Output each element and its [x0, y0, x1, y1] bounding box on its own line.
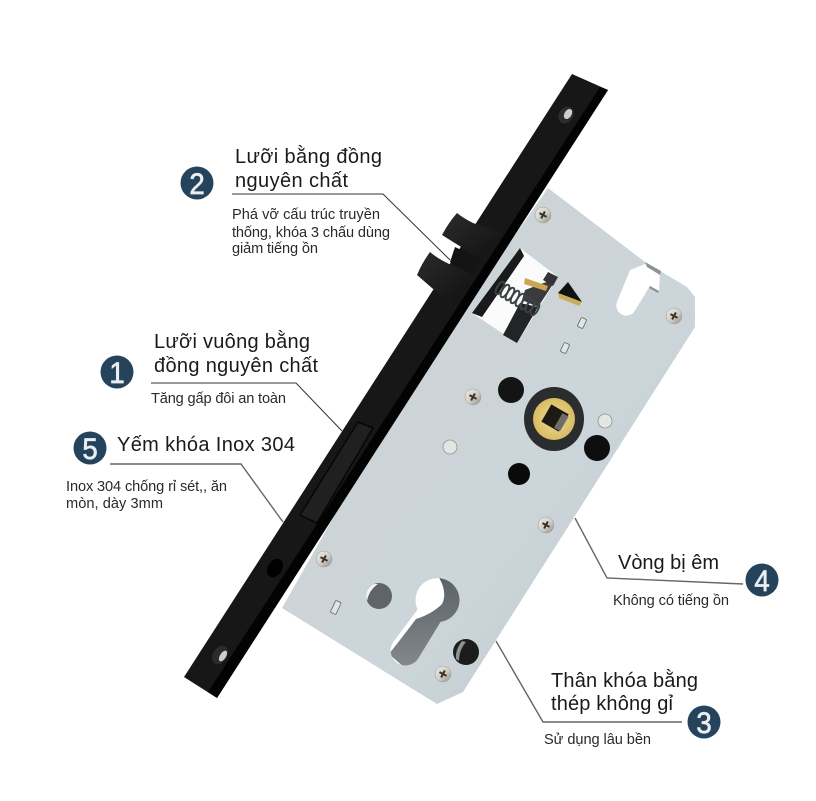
leader line 4 — [575, 518, 743, 584]
leader line 3 — [496, 641, 682, 722]
latch hooks — [417, 213, 502, 303]
badge 5: 5 — [82, 433, 98, 466]
badge 1: 1 — [109, 357, 125, 390]
heading 2: nguyên chất — [235, 170, 348, 192]
description 2: Phá vỡ cấu trúc truyền — [232, 207, 380, 223]
rivets — [443, 414, 612, 454]
heading 2 — [235, 145, 382, 192]
holes — [366, 377, 610, 665]
callout 4 — [575, 518, 778, 609]
description 2: thống, khóa 3 chấu dùng — [232, 225, 390, 241]
lock diagram — [184, 74, 695, 736]
badge 4: 4 — [754, 565, 770, 598]
description 2 — [232, 207, 390, 257]
bolt window — [472, 248, 558, 343]
description 1: Tăng gấp đôi an toàn — [151, 391, 286, 407]
callout 2 — [180, 145, 450, 260]
description 3: Sử dụng lâu bền — [544, 732, 651, 748]
heading 5: Yếm khóa Inox 304 — [117, 434, 295, 456]
screws — [316, 207, 682, 682]
leader line 2 — [232, 194, 450, 260]
callout 5 — [66, 432, 295, 522]
description 4: Không có tiếng ồn — [613, 593, 729, 609]
faceplate holes — [209, 104, 577, 667]
heading 1: Lưỡi vuông bằng — [154, 330, 310, 353]
description 5: Inox 304 chống rỉ sét,, ăn — [66, 479, 227, 495]
heading 3: thép không gỉ — [551, 693, 674, 715]
heading 4: Vòng bị êm — [618, 552, 719, 574]
heading 3: Thân khóa bằng — [551, 669, 698, 692]
spring — [494, 280, 541, 317]
badge 3 — [688, 706, 720, 740]
badge 4 — [746, 564, 778, 598]
faceplate — [184, 74, 608, 698]
heading 1: đồng nguyên chất — [154, 355, 318, 377]
heading 2: Lưỡi bằng đồng — [235, 145, 382, 168]
spindle — [524, 387, 584, 451]
leader line 1 — [151, 383, 342, 431]
description 5 — [66, 479, 227, 512]
badge 5 — [74, 432, 106, 466]
badge 2 — [180, 166, 214, 201]
lock body plate — [282, 188, 695, 704]
euro cylinder hole — [390, 578, 460, 666]
description 2: giảm tiếng ồn — [232, 241, 318, 257]
badge 1 — [100, 356, 134, 390]
small slots — [330, 317, 587, 615]
heading 1 — [154, 330, 318, 377]
badge 2: 2 — [189, 168, 205, 201]
callout 1 — [100, 330, 342, 431]
leader line 5 — [110, 464, 283, 522]
heading 3 — [551, 669, 698, 715]
triangle catch — [558, 282, 582, 306]
faceplate recess — [300, 422, 373, 523]
top slot — [616, 262, 661, 316]
callout 3 — [496, 641, 720, 748]
description 5: mòn, dày 3mm — [66, 496, 163, 512]
badge 3: 3 — [696, 707, 712, 740]
